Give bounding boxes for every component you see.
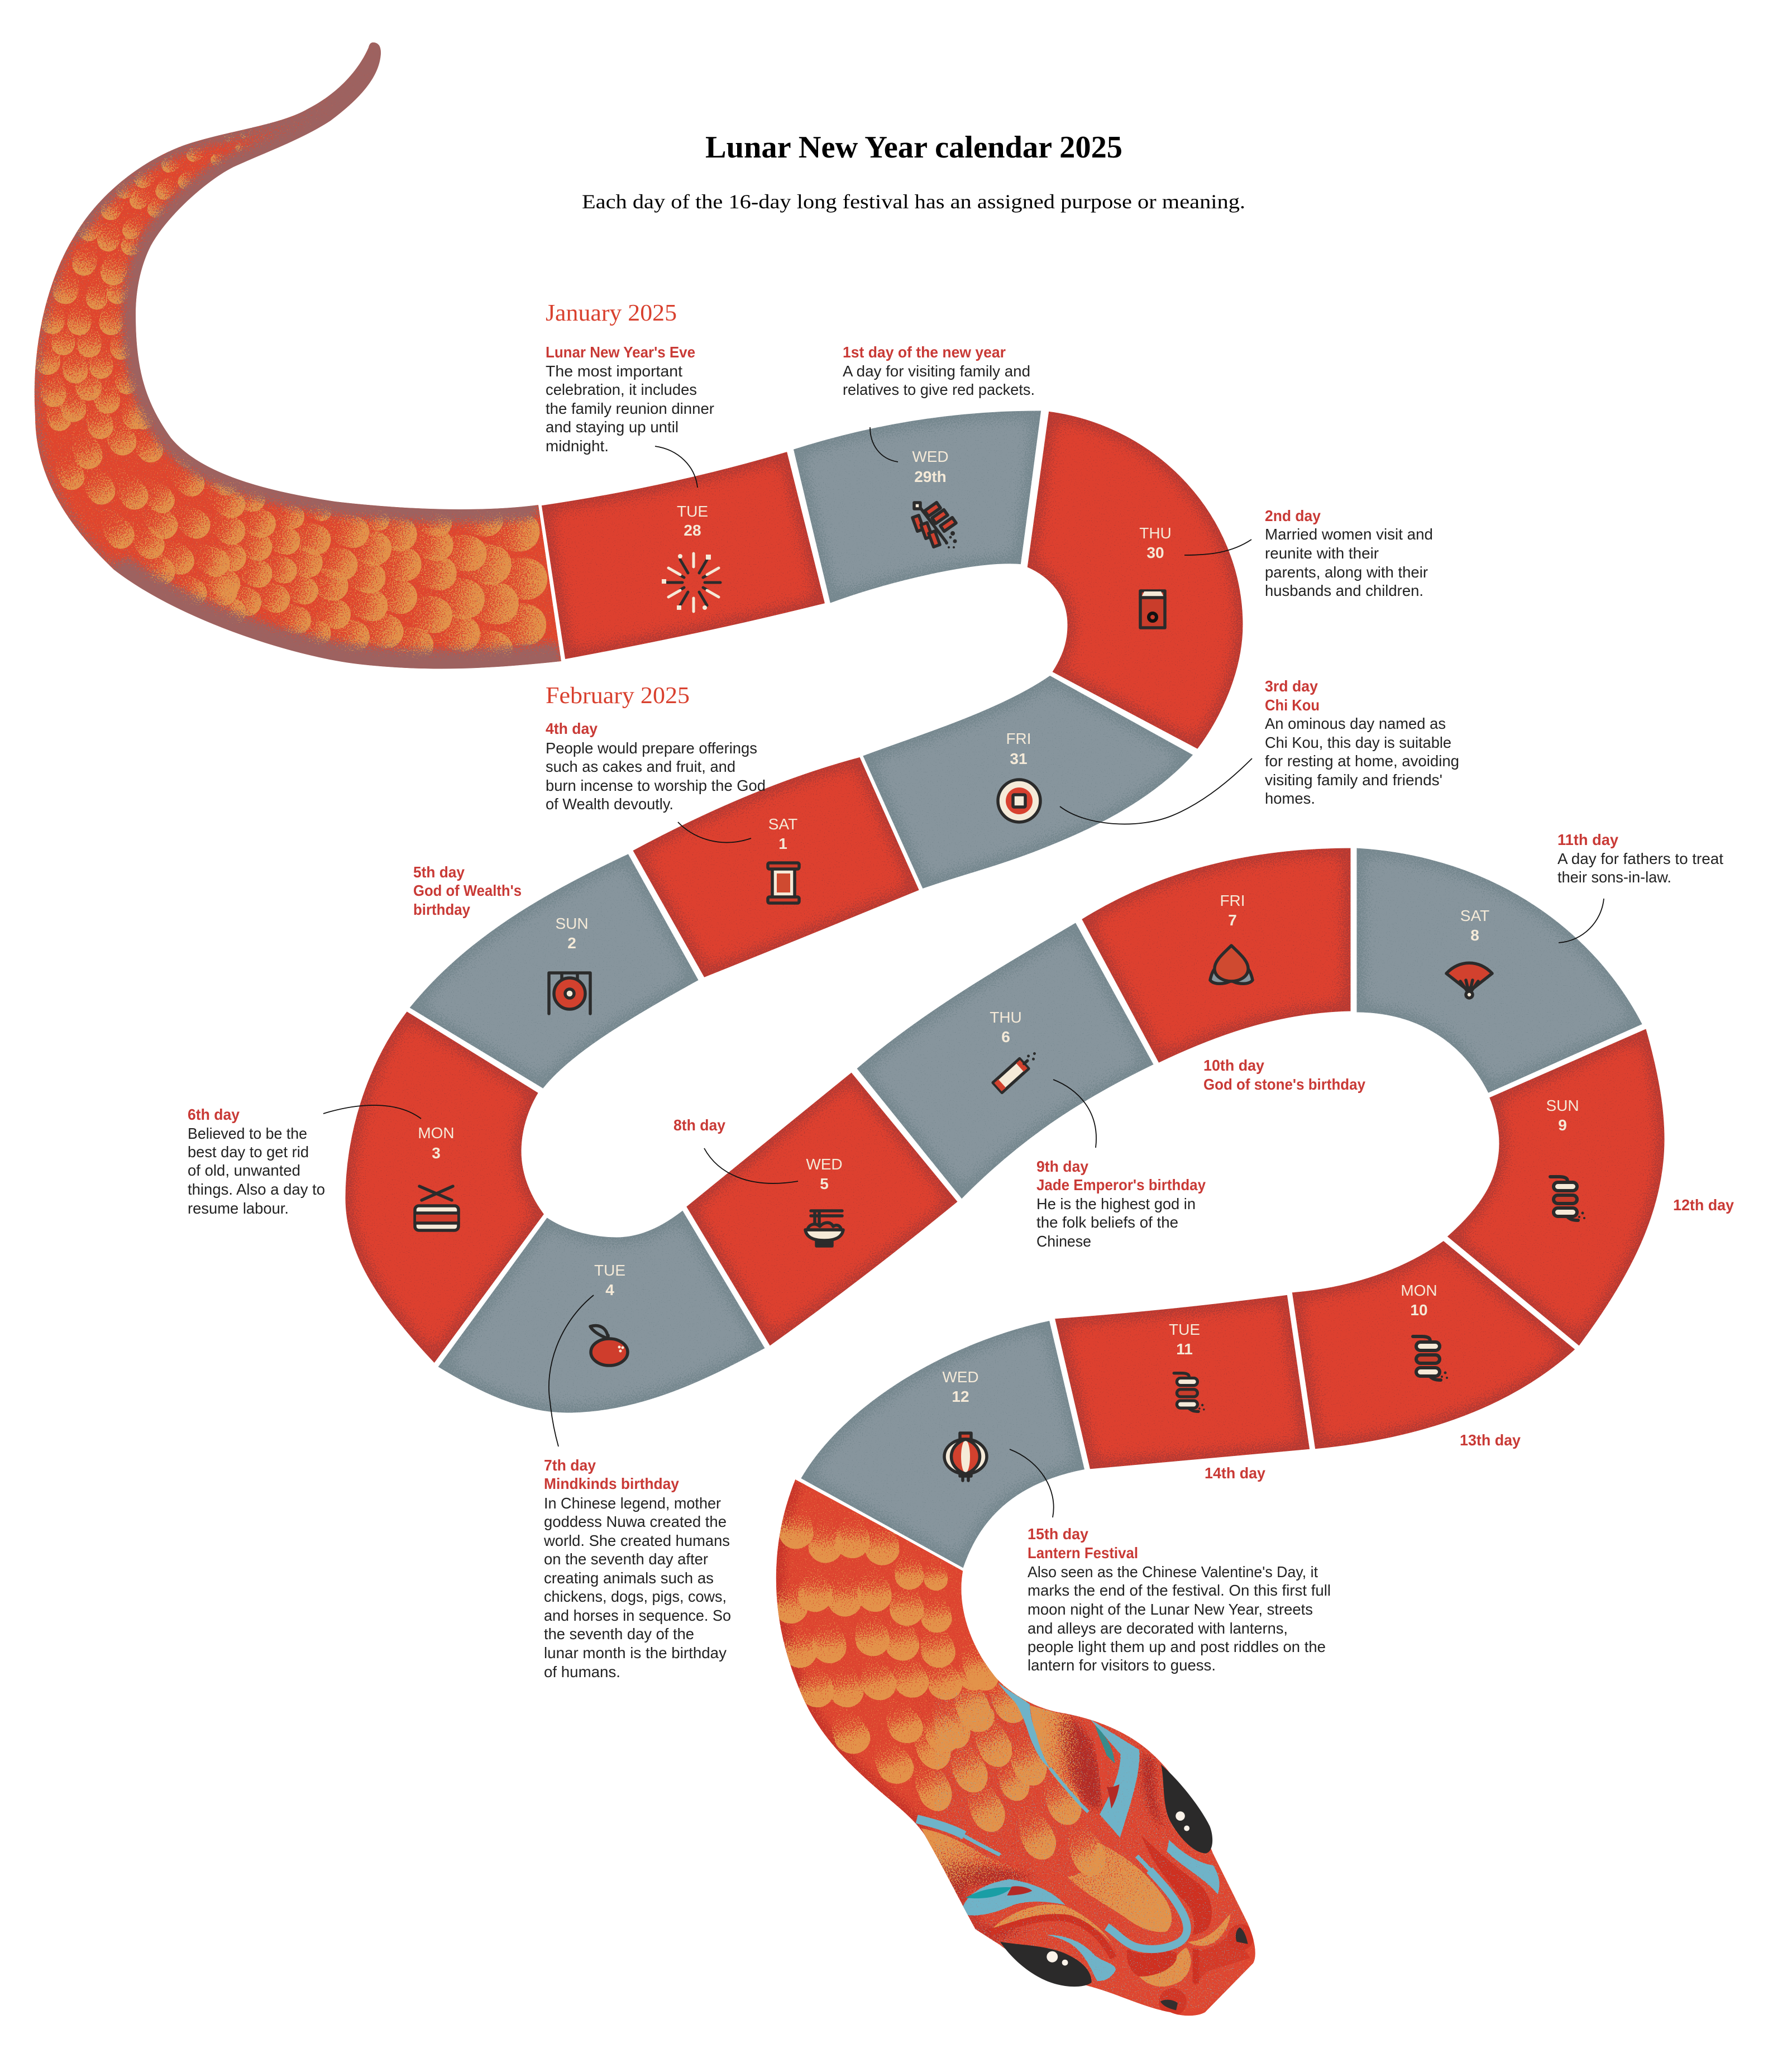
panel: Monday 3 segment [344, 1010, 546, 1365]
panel: Sunday 2 segment: SUN [555, 915, 589, 932]
panel: Friday 7 segment: 7 [1228, 911, 1237, 929]
panel: Friday 7 segment [1080, 847, 1352, 1064]
panel: Sunday 2 segment: 2 [567, 934, 576, 952]
panel: Thursday 30 segment: 30 [1146, 544, 1164, 561]
icon: firecracker bunch [912, 503, 957, 548]
panel: Friday 31 segment: FRI [1006, 730, 1031, 747]
callout: 5th day: birthday [413, 901, 470, 918]
callout: 3rd day Chi Kou: for resting at home, avoiding [1265, 752, 1459, 770]
callout: 15th day Lantern Festival: people light them up and post riddles on the [1028, 1638, 1326, 1655]
panel: Wednesday 5 segment [685, 1071, 959, 1348]
callout: 6th day: 6th day [188, 1106, 240, 1123]
callout: 4th day: People would prepare offerings [546, 739, 757, 757]
callout: 7th day: of humans. [544, 1663, 620, 1680]
callout: 3rd day Chi Kou [1265, 677, 1459, 807]
callout: 9th day: 9th day [1036, 1158, 1088, 1175]
callout: 4th day: burn incense to worship the God [546, 777, 766, 794]
panel: Tuesday 28 segment [540, 450, 826, 661]
callout: 6th day: best day to get rid [188, 1143, 309, 1161]
panel: Thursday 6 segment: THU [990, 1009, 1022, 1026]
callout: 8th day: 8th day [673, 1116, 725, 1134]
callout: 5th day: God of Wealth's [413, 882, 522, 899]
callout: 7th day: 7th day [544, 1457, 596, 1474]
callout: 7th day: In Chinese legend, mother [544, 1495, 721, 1512]
subtitle: Each day of the 16-day long festival has an assigned purpose or meaning. [582, 190, 1245, 213]
panel: Friday 31 segment: 31 [1010, 750, 1028, 767]
callout: 15th day Lantern Festival: marks the end of the festival. On this first full [1028, 1582, 1331, 1599]
panel: Monday 10 segment: MON [1401, 1282, 1437, 1299]
panel: Monday 10 segment [1291, 1239, 1577, 1450]
callout: 2nd day: reunite with their [1265, 545, 1379, 562]
icon: firework [662, 553, 720, 612]
callout: 15th day Lantern Festival: and alleys are decorated with lanterns, [1028, 1620, 1288, 1637]
illustration: snake neck and head [773, 1479, 1255, 2016]
callout: 7th day: creating animals such as [544, 1569, 714, 1587]
panel: Wednesday 29th segment: 29th [914, 468, 947, 485]
panel: Friday 7 segment: FRI [1220, 892, 1245, 909]
icon: coiled firecracker [1174, 1373, 1205, 1411]
callout: 7th day: and horses in sequence. So [544, 1607, 731, 1624]
callout: 2nd day: husbands and children. [1265, 582, 1423, 599]
panel: Saturday 1 segment: SAT [768, 815, 797, 833]
callout: 3rd day Chi Kou: An ominous day named as [1265, 715, 1446, 732]
panel: Wednesday 5 segment: 5 [820, 1175, 829, 1192]
panel: Monday 10 segment: 10 [1410, 1301, 1428, 1319]
callout: 13th day: 13th day [1460, 1431, 1521, 1449]
panel: Thursday 30 segment [1026, 410, 1244, 751]
panel: Tuesday 4 segment: TUE [594, 1262, 625, 1279]
panel: Tuesday 28 segment: 28 [684, 522, 701, 539]
callout: 4th day: 4th day [546, 720, 598, 737]
callout: 1st day [843, 343, 1035, 398]
callout: 7th day: on the seventh day after [544, 1550, 708, 1568]
callout: 5th day: 5th day [413, 863, 465, 881]
heading: February 2025: February 2025 [546, 683, 690, 709]
callout: 15th day Lantern Festival: lantern for visitors to guess. [1028, 1656, 1216, 1674]
icon: coiled firecracker [1413, 1336, 1448, 1380]
icon: scroll [768, 863, 799, 903]
icon: folding fan [1446, 963, 1492, 998]
callout: 11th day: A day for fathers to treat [1557, 850, 1723, 867]
panel: Tuesday 11 segment: 11 [1176, 1340, 1193, 1358]
callout: 7th day: chickens, dogs, pigs, cows, [544, 1588, 727, 1605]
callout: 10th day: God of stone's birthday [1203, 1076, 1365, 1093]
callout: 3rd day Chi Kou: homes. [1265, 790, 1315, 807]
callout: 9th day: He is the highest god in [1036, 1195, 1196, 1212]
icon: lower eye [1000, 1942, 1092, 1987]
panel: Tuesday 4 segment [436, 1209, 767, 1414]
callout: 3rd day Chi Kou: Chi Kou [1265, 696, 1320, 714]
leader lines [323, 427, 1604, 1517]
icon: noodle bowl [805, 1211, 843, 1246]
panel: Saturday 8 segment: SAT [1460, 907, 1489, 924]
callout: 6th day: resume labour. [188, 1200, 289, 1217]
panel: Tuesday 11 segment: TUE [1169, 1321, 1200, 1338]
icon: gong [549, 973, 590, 1014]
callout: 3rd day Chi Kou: visiting family and friends' [1265, 771, 1442, 789]
callout: 2nd day: Married women visit and [1265, 526, 1433, 543]
callout: 2nd day: 2nd day [1265, 507, 1321, 524]
panel: Sunday 2 segment [408, 852, 700, 1090]
callout: 14th day: 14th day [1205, 1464, 1265, 1482]
callout: 7th day: the seventh day of the [544, 1625, 694, 1643]
callout: 3rd day Chi Kou: Chi Kou, this day is suitable [1265, 734, 1451, 751]
icon: upper eye [1161, 1765, 1212, 1853]
callout: 6th day [188, 1106, 325, 1217]
panel: Thursday 6 segment: 6 [1001, 1028, 1010, 1045]
callout: 11th day: their sons-in-law. [1557, 868, 1671, 886]
panel: Monday 3 segment: 3 [432, 1144, 441, 1162]
panel: Saturday 8 segment: 8 [1470, 927, 1479, 944]
callout: Lunar New Year's Eve: celebration, it includes [546, 381, 697, 398]
callout: 9th day [1036, 1158, 1206, 1250]
icon: drum [415, 1186, 458, 1230]
panel: Saturday 8 segment [1355, 847, 1644, 1095]
callout: Lunar New Year's Eve [546, 343, 714, 455]
icon: firecracker [993, 1048, 1040, 1092]
callout: 6th day: of old, unwanted [188, 1162, 300, 1179]
callout: 7th day: Mindkinds birthday [544, 1475, 679, 1492]
callout: 6th day: Believed to be the [188, 1125, 307, 1142]
panel: Monday 3 segment: MON [418, 1124, 455, 1142]
callout: 4th day [546, 720, 766, 813]
callout: 10th day [1203, 1057, 1365, 1093]
panel: Wednesday 12 segment: 12 [952, 1388, 969, 1405]
panel: Tuesday 4 segment: 4 [605, 1281, 614, 1298]
callout: 15th day Lantern Festival: Also seen as the Chinese Valentine's Day, it [1028, 1563, 1318, 1581]
callout: 1st day: relatives to give red packets. [843, 381, 1035, 398]
icon: red envelope [1140, 591, 1165, 628]
callout: 7th day: world. She created humans [543, 1532, 730, 1549]
callout: 15th day Lantern Festival: Lantern Festival [1028, 1544, 1138, 1562]
callout: 5th day [413, 863, 522, 918]
callout: Lunar New Year's Eve: The most important [546, 362, 682, 380]
callout: 2nd day: parents, along with their [1265, 564, 1428, 581]
callout: 1st day: A day for visiting family and [843, 362, 1030, 380]
callout: 12th day: 12th day [1673, 1196, 1734, 1214]
panel: Sunday 9 segment: SUN [1546, 1097, 1579, 1114]
callout: 7th day [543, 1457, 731, 1680]
callout: Lunar New Year's Eve: and staying up until [546, 418, 679, 436]
panel: Thursday 6 segment [855, 921, 1155, 1201]
icon: peach [1210, 946, 1253, 984]
icon: mandarin orange [590, 1326, 628, 1366]
callout: 7th day: lunar month is the birthday [544, 1644, 727, 1662]
callout: 15th day Lantern Festival: 15th day [1028, 1525, 1088, 1543]
panel: Sunday 9 segment [1445, 1027, 1666, 1348]
callout: 11th day [1557, 831, 1723, 886]
panel: Wednesday 12 segment [799, 1319, 1086, 1570]
icon: coiled firecracker [1550, 1177, 1585, 1220]
panel: Wednesday 12 segment: WED [942, 1368, 979, 1386]
panel: Friday 31 segment [861, 674, 1195, 890]
callout: 3rd day Chi Kou: 3rd day [1265, 677, 1318, 695]
callout: 15th day Lantern Festival: moon night of the Lunar New Year, streets [1028, 1601, 1313, 1618]
callout: Lunar New Year's Eve: midnight. [546, 437, 609, 455]
panel: Tuesday 28 segment: TUE [677, 503, 708, 520]
title: Lunar New Year calendar 2025 [705, 130, 1122, 165]
panel: Saturday 1 segment: 1 [778, 835, 787, 852]
callout: Lunar New Year's Eve: the family reunion dinner [546, 400, 714, 417]
callout: 15th day Lantern Festival [1028, 1525, 1331, 1674]
callout: 9th day: Jade Emperor's birthday [1036, 1176, 1206, 1193]
callout: 2nd day [1265, 507, 1433, 599]
callout: 6th day: things. Also a day to [188, 1181, 325, 1198]
illustration: snake tail with scales [31, 42, 561, 672]
icon: lantern [944, 1433, 987, 1481]
callout: 10th day: 10th day [1203, 1057, 1264, 1074]
callout: 11th day: 11th day [1557, 831, 1618, 848]
panel: Saturday 1 segment [631, 756, 921, 979]
panel: Sunday 9 segment: 9 [1558, 1116, 1567, 1134]
icon: nostrils [1160, 1927, 1248, 2011]
heading: January 2025: January 2025 [546, 300, 677, 326]
panel: Tuesday 11 segment [1053, 1293, 1311, 1471]
callout: 7th day: goddess Nuwa created the [544, 1513, 727, 1530]
callout: 9th day: the folk beliefs of the [1036, 1214, 1178, 1231]
callout: Lunar New Year's Eve: Lunar New Year's Eve [546, 343, 695, 361]
callout: 9th day: Chinese [1036, 1233, 1091, 1250]
callout: 1st day: 1st day of the new year [843, 343, 1006, 361]
panel: Thursday 30 segment: THU [1139, 524, 1172, 542]
panel: Wednesday 5 segment: WED [806, 1156, 843, 1173]
icon: coin [998, 780, 1040, 822]
callout: 4th day: of Wealth devoutly. [546, 795, 673, 813]
panel: Wednesday 29th segment [792, 409, 1043, 605]
panel: Wednesday 29th segment: WED [912, 448, 949, 465]
callout: 4th day: such as cakes and fruit, and [546, 758, 735, 775]
